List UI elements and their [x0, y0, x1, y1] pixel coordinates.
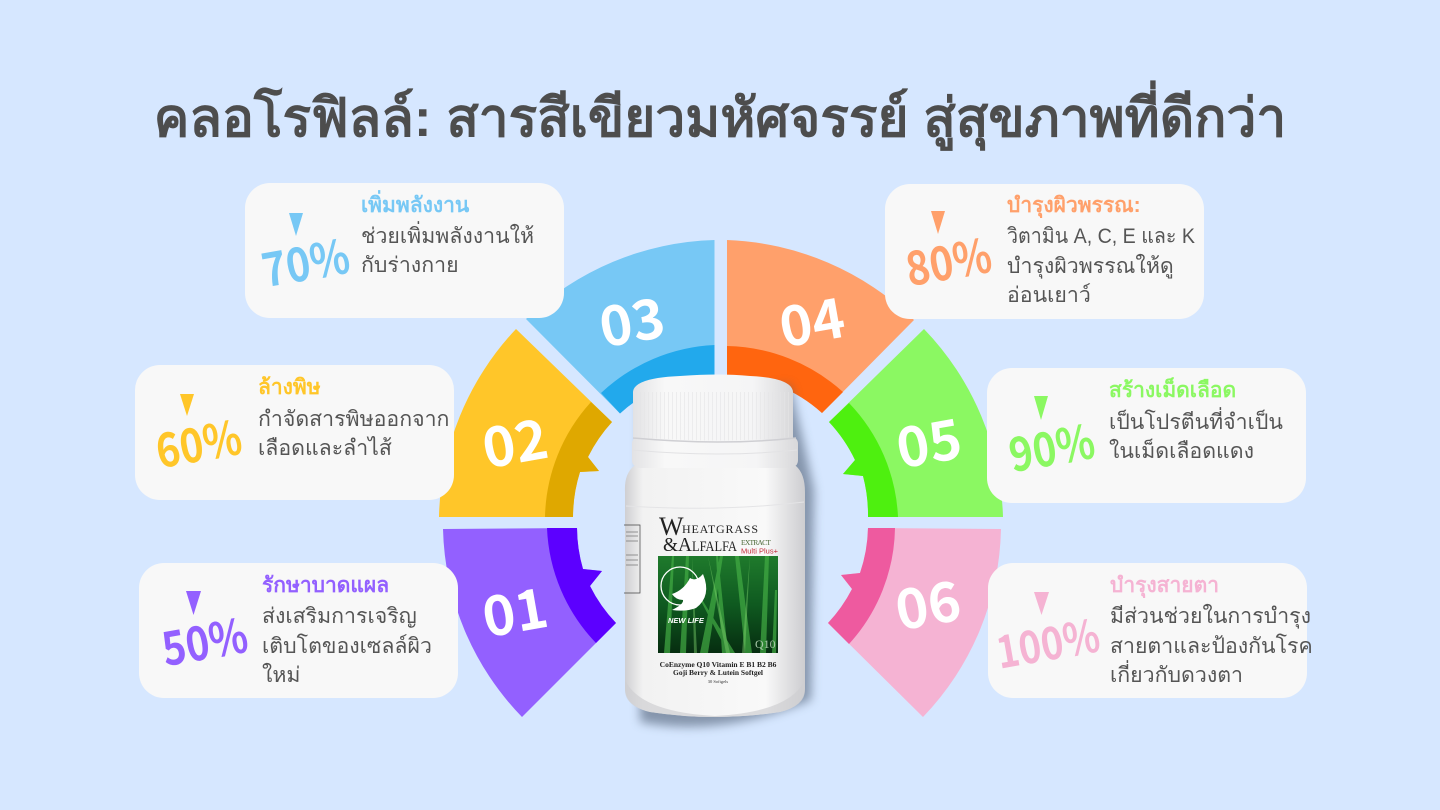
card: 80% skin: บำรุงผิวพรรณให้ดู [1007, 254, 1174, 279]
segment 04 [727, 240, 914, 413]
bottle label text: &A [663, 534, 693, 556]
product bottle [624, 374, 814, 727]
segment 02 [439, 329, 612, 517]
bottle label image: wheatgrass: NEW LIFE [668, 616, 705, 625]
card: 50% wound: 50% [156, 597, 253, 680]
bottle label text [659, 512, 779, 556]
bottle label text: HEATGRASS [682, 522, 758, 536]
card: 100% eyes [988, 563, 1313, 698]
segment 02: 02 [475, 394, 553, 484]
card: 100% eyes: เกี่ยวกับดวงตา [1110, 660, 1243, 687]
card: 100% eyes: 100% [991, 600, 1104, 682]
card: 100% eyes: มีส่วนช่วยในการบำรุง [1110, 604, 1311, 629]
card: 80% skin [885, 184, 1204, 319]
bottle side panel [624, 525, 640, 593]
card: 60% detox: ล้างพิษ [258, 375, 321, 399]
segment 03: 03 [592, 273, 670, 363]
bottle label caption: CoEnzyme Q10 Vitamin E B1 B2 B6 [660, 660, 777, 669]
card: 70% energy: เพิ่มพลังงาน [361, 189, 470, 217]
card: 60% detox: 60% [150, 399, 247, 482]
bottle label caption: 30 Softgels [708, 679, 728, 684]
bottle label text: Multi Plus+ [741, 546, 779, 556]
segment 05 [829, 329, 1003, 517]
card: 50% wound: ใหม่ [262, 663, 300, 687]
card: 90% blood: 90% [1003, 403, 1100, 486]
segment 03 [526, 240, 714, 414]
title: คลอโรฟิลล์: สารสีเขียวมหัศจรรย์ สู่สุขภาพที่ดีกว่า [154, 80, 1286, 151]
segment 04: 04 [772, 273, 850, 363]
bottle label caption: Goji Berry & Lutein Softgel [673, 668, 763, 677]
card: 100% eyes: บำรุงสายตา [1110, 574, 1219, 599]
segment 06: 06 [888, 556, 966, 646]
card: 90% blood [987, 368, 1306, 503]
card: 90% blood: เป็นโปรตีนที่จำเป็น [1109, 407, 1283, 434]
card: 100% eyes: สายตาและป้องกันโรค [1110, 633, 1313, 658]
segment 05: 05 [889, 394, 967, 484]
card: 70% energy: กับร่างกาย [361, 253, 459, 277]
card: 50% wound [139, 563, 458, 698]
card: 80% skin: 80% [900, 217, 996, 300]
segment 01 [443, 528, 616, 717]
card: 50% wound: เติบโตของเซลล์ผิว [262, 633, 432, 658]
card: 50% wound: รักษาบาดแผล [262, 574, 389, 597]
bottle label text: W [659, 512, 684, 541]
card: 80% skin: วิตามิน A, C, E และ K [1007, 224, 1195, 248]
bottle label text: LFALFA [692, 539, 737, 555]
card: 60% detox: กำจัดสารพิษออกจาก [258, 407, 449, 431]
card: 80% skin: อ่อนเยาว์ [1007, 283, 1091, 307]
card: 70% energy: 70% [256, 218, 354, 301]
bottle label caption [660, 660, 777, 684]
segment 06 [828, 528, 1001, 717]
card: 90% blood: สร้างเม็ดเลือด [1109, 376, 1236, 402]
card: 80% skin: บำรุงผิวพรรณ: [1007, 194, 1141, 219]
card: 60% detox [135, 365, 454, 500]
card: 70% energy [245, 183, 564, 318]
card: 90% blood: ในเม็ดเลือดแดง [1109, 436, 1254, 463]
card: 70% energy: ช่วยเพิ่มพลังงานให้ [361, 221, 534, 248]
bottle label image: wheatgrass [658, 556, 778, 653]
card: 60% detox: เลือดและลำไส้ [258, 436, 392, 460]
segment 01: 01 [475, 563, 553, 653]
card: 50% wound: ส่งเสริมการเจริญ [262, 604, 417, 628]
bottle label image: wheatgrass: Q10 [755, 637, 776, 651]
bottle label text: EXTRACT [741, 538, 771, 547]
